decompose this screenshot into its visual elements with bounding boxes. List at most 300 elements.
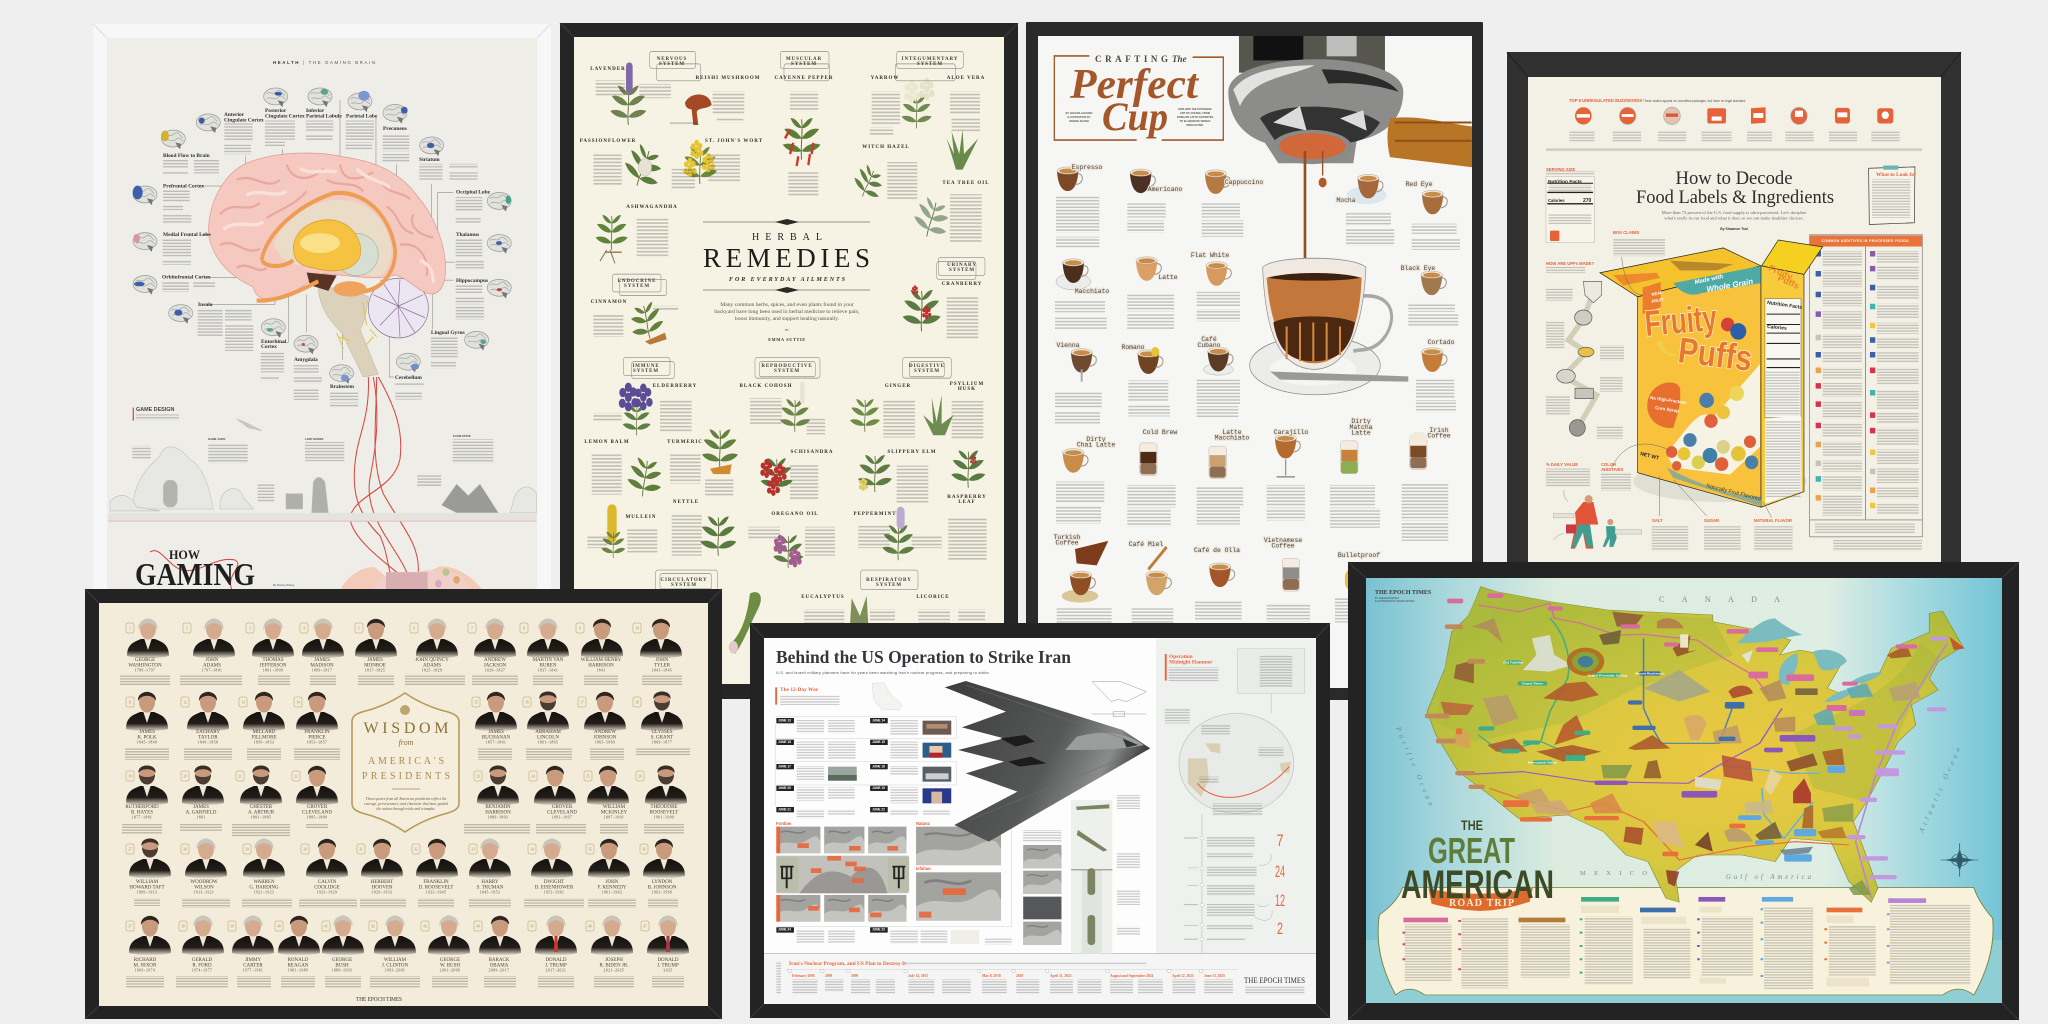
portrait: Franklin Pierce <box>294 692 340 760</box>
portrait: Zachary Taylor: 1849–1850 <box>198 740 218 744</box>
iran poster headings and numbers: 2009 <box>851 974 858 978</box>
portrait: George W. Bush: 43 <box>423 924 427 928</box>
cereal box lettering: FRUIT <box>1651 296 1665 304</box>
portrait: Calvin Coolidge: COOLIDGE <box>314 885 340 890</box>
herb illustrations <box>596 62 985 654</box>
iran poster headings and numbers: JUNE 13 <box>778 718 791 722</box>
brain region labels: Blood Flow to Brain <box>163 153 210 159</box>
portrait: Woodrow Wilson <box>181 838 230 908</box>
brain region labels: Cingulate Cortex <box>265 113 305 119</box>
portrait: Warren G. Harding: G. HARDING <box>249 885 279 890</box>
drink name labels: Cubano <box>1197 342 1221 349</box>
portrait: Gerald R. Ford: 1974–1977 <box>192 968 212 972</box>
portrait: Richard M. Nixon: RICHARD <box>134 958 156 963</box>
body system labels: IMMUNE <box>632 364 660 369</box>
brain region labels: Orbitofrontal Cortex <box>162 275 211 281</box>
title frame <box>1054 56 1223 140</box>
herb names: RASPBERRY <box>947 495 987 500</box>
portrait: James Monroe: JAMES <box>367 658 383 663</box>
portrait: Benjamin Harrison: 23 <box>476 774 480 778</box>
road trip stop labels: Old Faithful <box>1503 661 1523 665</box>
portrait: Andrew Johnson <box>578 692 626 760</box>
portrait: James K. Polk: 11 <box>128 700 132 704</box>
portrait: John Adams: ADAMS <box>203 663 221 668</box>
drink name labels: Espresso <box>1072 164 1103 171</box>
iran poster headings and numbers: JUNE 17 <box>778 764 791 768</box>
herb names: MULLEIN <box>626 515 656 520</box>
iran poster headings and numbers: JUNE 19 <box>872 786 885 790</box>
cereal box <box>1600 240 1823 507</box>
portrait: Millard Fillmore: 1850–1853 <box>254 740 274 744</box>
cereal box lettering: Made with <box>1694 274 1724 286</box>
operation timeline <box>1184 837 1272 941</box>
road trip title: AMERICAN <box>1401 863 1554 907</box>
herb names: LEAF <box>958 500 976 505</box>
perfect cup title: BY LEEANA ALESSIO <box>1066 112 1092 115</box>
drink name labels: Black Eye <box>1401 265 1435 272</box>
map landmark illustrations <box>1440 612 1965 895</box>
brain poster title: HOW <box>169 548 200 562</box>
portrait: Andrew Jackson: JACKSON <box>484 663 507 668</box>
portrait: Thomas Jefferson: 3 <box>249 626 251 630</box>
road trip stop labels: Grand Prismatic Spring <box>1588 674 1627 677</box>
drink name labels: Vietnamese <box>1264 537 1302 544</box>
iran poster headings and numbers: Natanz <box>916 821 930 826</box>
drink name labels: Dirty <box>1086 436 1106 443</box>
brain region labels: Posterior <box>265 108 286 114</box>
portrait: Theodore Roosevelt: 1901–1909 <box>654 815 674 819</box>
portrait: Joseph R. Biden Jr.: 2021–2025 <box>604 968 624 972</box>
iran poster headings and numbers: 2 <box>1277 919 1283 938</box>
iran poster headings and numbers: April 12, 2025 <box>1172 974 1194 978</box>
road trip title: THE <box>1461 817 1483 833</box>
portrait: Zachary Taylor <box>181 692 232 760</box>
portrait: Abraham Lincoln: ABRAHAM <box>535 730 561 735</box>
route lists <box>1402 897 1970 990</box>
iran poster headings and numbers: August and September 2024 <box>1110 974 1153 978</box>
iran poster headings and numbers: JUNE 21 <box>778 808 791 812</box>
portrait: Grover Cleveland second term: GROVER <box>552 805 572 810</box>
portrait: Grover Cleveland second term: 24 <box>531 774 535 778</box>
road trip title: GREAT <box>1428 830 1515 871</box>
portrait: George Washington: 1 <box>129 626 131 630</box>
perfect cup title <box>1066 54 1213 139</box>
title panel: Wisdom from America's Presidents: the nation through trials and triumphs. <box>376 807 436 811</box>
drink name labels: Carajillo <box>1274 429 1308 436</box>
drink name labels: Matcha <box>1349 424 1373 431</box>
portrait: Ronald Reagan: REAGAN <box>288 963 309 968</box>
portrait: John Quincy Adams: ADAMS <box>423 663 441 668</box>
portrait: Joseph R. Biden Jr.: JOSEPH <box>605 958 623 963</box>
portrait: Harry S. Truman <box>469 838 511 908</box>
portrait: Donald J. Trump 47: J. TRUMP <box>657 963 679 968</box>
portrait: James A. Garfield: A. GARFIELD <box>186 810 217 815</box>
timeline photos <box>828 721 951 803</box>
portrait: Martin Van Buren: 1837–1841 <box>538 668 558 672</box>
portrait: William Howard Taft <box>126 838 171 906</box>
portrait: Chester A. Arthur: 1881–1885 <box>251 815 271 819</box>
parent and child illustration <box>1553 490 1642 549</box>
portrait: Grover Cleveland: CLEVELAND <box>302 810 332 815</box>
portrait: Joseph R. Biden Jr.: R. BIDEN JR. <box>600 963 628 968</box>
portrait: Grover Cleveland: GROVER <box>307 805 327 810</box>
portrait: William J. Clinton: 1993–2001 <box>385 968 405 972</box>
portrait: Zachary Taylor: ZACHARY <box>196 730 220 735</box>
cereal box lettering: Puffs <box>1776 273 1801 291</box>
herb names: NETTLE <box>673 500 699 505</box>
portrait: Herbert Hoover: 31 <box>359 848 363 852</box>
food poster headings: By Shawnee Tsai <box>1720 227 1748 231</box>
portrait: Grover Cleveland: 1885–1889 <box>307 815 327 819</box>
portrait: Ulysses S. Grant: S. GRANT <box>651 735 673 740</box>
poster kicker: HEALTH | THE GAMING BRAIN <box>273 60 377 65</box>
portrait: Martin Van Buren: 8 <box>523 626 525 630</box>
herb names: TEA TREE OIL <box>942 181 990 186</box>
portrait: Benjamin Harrison: 1889–1893 <box>488 815 508 819</box>
portrait: Donald J. Trump 45: DONALD <box>545 958 567 963</box>
drink name labels: Macchiato <box>1075 288 1109 295</box>
body system labels: INTEGUMENTARY <box>902 57 958 62</box>
portrait: George Bush: 1989–1993 <box>332 968 352 972</box>
food poster headings: SALT <box>1652 518 1663 523</box>
perfect cup title: Cup <box>1102 94 1168 139</box>
portrait: Chester A. Arthur: CHESTER <box>250 805 272 810</box>
body system labels: SYSTEM <box>791 62 817 67</box>
drink name labels: Chai Latte <box>1077 442 1115 449</box>
portrait: Chester A. Arthur: 21 <box>238 774 242 778</box>
iran poster headings and numbers: Operation <box>1169 654 1193 660</box>
portrait: Barack Obama: BARACK <box>489 958 509 963</box>
brain region labels: GAME DESIGN <box>136 407 174 413</box>
herbal remedies title block: HERBAL <box>752 232 822 243</box>
iran poster headings and numbers <box>776 647 1305 985</box>
portrait: George Bush: GEORGE <box>332 958 352 963</box>
cereal box lettering: Nutrition Facts <box>1767 300 1803 311</box>
drink descriptions and recipes <box>1055 196 1460 625</box>
portrait: James K. Polk: 1845–1849 <box>137 740 157 744</box>
portrait: John F. Kennedy <box>586 838 636 908</box>
brain region labels: Inferior <box>306 108 324 114</box>
drink name labels: Café de Olla <box>1194 547 1240 554</box>
portrait: Grover Cleveland second term <box>529 766 586 834</box>
brain region labels: Parietal Lobe <box>346 114 378 120</box>
cereal box lettering: Whole Grain <box>1706 277 1754 294</box>
portrait: Andrew Johnson: 17 <box>580 700 584 704</box>
portrait: Herbert Hoover <box>357 838 406 908</box>
portrait: Andrew Jackson <box>468 618 518 685</box>
herb names: BLACK COHOSH <box>740 384 792 389</box>
title panel: Wisdom from America's Presidents: These quotes from all American presidents reflect the <box>366 797 447 801</box>
body system labels: RESPIRATORY <box>866 578 912 583</box>
herbal remedies title block <box>703 219 870 342</box>
portrait: Richard M. Nixon: M. NIXON <box>133 963 157 968</box>
portrait: William Howard Taft: WILLIAM <box>136 880 158 885</box>
herb names: YARROW <box>871 76 899 81</box>
herb names: PEPPERMINT <box>853 512 897 517</box>
portrait: Chester A. Arthur <box>232 766 290 837</box>
road trip stop labels: Monument Valley <box>1528 761 1557 764</box>
portrait: James A. Garfield <box>180 766 224 832</box>
portrait: George Washington: 1789–1797 <box>135 668 155 672</box>
portrait: Rutherford B. Hayes: 19 <box>128 774 132 778</box>
portrait: John Adams: JOHN <box>206 658 218 663</box>
road trip map labels: ILLUSTRATION BY ORIANA ZHANG <box>1375 600 1415 603</box>
brain region labels <box>136 108 491 441</box>
brain region labels: Anterior <box>224 112 244 118</box>
iran poster headings and numbers: Fordow <box>776 821 792 826</box>
portrait: Ulysses S. Grant: 1869–1877 <box>652 740 672 744</box>
portrait: William McKinley: 1897–1901 <box>604 815 624 819</box>
portrait: James K. Polk: K. POLK <box>137 735 157 740</box>
portrait: James Monroe: MONROE <box>364 663 386 668</box>
portrait: James K. Polk <box>125 692 169 760</box>
perfect cup title: ILLUSTRATION BY <box>1067 115 1091 119</box>
herb names: EUCALYPTUS <box>801 595 845 600</box>
drink name labels: Coffee <box>1055 540 1079 547</box>
drink name labels: Café Miel <box>1129 541 1163 548</box>
drink name labels: Romano <box>1121 344 1145 351</box>
drink name labels: Red Eye <box>1406 181 1433 188</box>
portrait: Dwight D. Eisenhower <box>524 838 584 908</box>
road trip map labels: MEXICO <box>1580 870 1647 877</box>
food poster headings: 270 <box>1583 198 1592 204</box>
drink name labels: Coffee <box>1271 543 1295 550</box>
drink name labels: Cortado <box>1428 339 1455 346</box>
brain region descriptions <box>132 121 493 502</box>
brain region labels: Striatum <box>419 157 440 163</box>
brain region labels: Amygdala <box>294 357 318 363</box>
herbal remedies title block: backyard have long been used in herbal medicine to relieve pain, <box>714 309 860 315</box>
herb names: TURMERIC <box>667 440 703 445</box>
portrait: Thomas Jefferson: 1801–1809 <box>263 668 283 672</box>
road trip map labels <box>1375 590 1962 881</box>
body system labels: REPRODUCTIVE <box>761 364 813 369</box>
portrait: Jimmy Carter <box>228 916 274 988</box>
portrait: William McKinley: 25 <box>586 774 590 778</box>
poster: Behind the US Operation to Strike Iran <box>750 623 1330 1018</box>
portrait: Lyndon B. Johnson: LYNDON <box>652 880 672 885</box>
portrait: John F. Kennedy: F. KENNEDY <box>597 885 627 890</box>
portrait: Calvin Coolidge <box>299 838 357 908</box>
portrait: Gerald R. Ford: 38 <box>181 924 185 928</box>
cereal box lettering: NET WT <box>1640 451 1660 462</box>
drink name labels: Irish <box>1429 427 1449 434</box>
portrait: Benjamin Harrison <box>464 766 530 834</box>
portrait: Donald J. Trump 45: 2017–2021 <box>546 968 566 972</box>
portrait: William J. Clinton: WILLIAM <box>384 958 406 963</box>
portrait: Lyndon B. Johnson <box>640 838 685 908</box>
herb names: ASHWAGANDHA <box>626 205 678 210</box>
cereal box lettering: Fruity <box>1643 297 1718 344</box>
portrait: Barack Obama <box>474 916 521 988</box>
title panel: Wisdom from America's Presidents <box>352 693 459 832</box>
portrait: James Buchanan: 1857–1861 <box>486 740 506 744</box>
portrait: Joseph R. Biden Jr.: 46 <box>588 924 592 928</box>
food poster side notes <box>1546 171 1922 551</box>
brain region labels: Entorhinal <box>261 339 286 345</box>
food poster headings: What to Look for <box>1876 172 1917 178</box>
herbal remedies title block: Many common herbs, spices, and even plants found in your <box>720 301 854 308</box>
food poster headings: How to Decode <box>1676 168 1792 189</box>
portrait: Theodore Roosevelt: ROOSEVELT <box>650 810 678 815</box>
portrait: James A. Garfield: 20 <box>183 774 187 778</box>
portrait: Franklin D. Roosevelt <box>412 838 458 908</box>
herb names: LAVENDER <box>590 67 626 72</box>
UPF manufacturing process diagram <box>1546 281 1624 439</box>
portrait: Woodrow Wilson: WILSON <box>194 885 214 890</box>
perfect cup title: EXPLORE THE EXTENSIVE <box>1178 108 1212 111</box>
portrait: William Henry Harrison: 9 <box>579 626 581 630</box>
herbal remedies title block: BY <box>785 328 790 332</box>
herb names: REISHI MUSHROOM <box>696 76 760 81</box>
brain region labels: Precuneus <box>383 126 407 132</box>
portrait: Rutherford B. Hayes: 1877–1881 <box>132 815 152 819</box>
portrait: William Howard Taft: 1909–1913 <box>137 890 157 894</box>
portrait: James A. Garfield: JAMES <box>193 805 209 810</box>
portrait: Ulysses S. Grant <box>633 692 690 756</box>
iran poster headings and numbers: June 13, 2025 <box>1204 974 1225 978</box>
portrait: John Adams: 1797–1801 <box>202 668 222 672</box>
drink name labels: Coffee <box>1427 433 1451 440</box>
brain region labels: Cingulate Cortex <box>224 117 264 123</box>
perfect cup title: FAMILIAR LATTE FAVORITES <box>1177 115 1213 119</box>
portrait: Harry S. Truman: HARRY <box>481 880 499 885</box>
herb names: ST. JOHN'S WORT <box>705 139 763 144</box>
portrait: Jimmy Carter: 1977–1981 <box>243 968 263 972</box>
food poster headings: ADDITIVES <box>1601 467 1624 472</box>
herb names: ELDERBERRY <box>653 384 697 389</box>
body system labels: SYSTEM <box>659 62 685 67</box>
hands and controller <box>340 566 482 589</box>
brain region labels: GAME JUICE <box>208 437 226 441</box>
body system labels: DIGESTIVE <box>909 364 945 369</box>
portrait: William Howard Taft: 27 <box>128 848 132 852</box>
road trip map labels: Gulf of America <box>1726 874 1812 881</box>
portrait: Dwight D. Eisenhower: 34 <box>530 848 534 852</box>
portrait: Rutherford B. Hayes <box>122 766 168 834</box>
herb names: PASSIONFLOWER <box>580 139 636 144</box>
iran poster headings and numbers: Iran's Nuclear Program, and US Plan to Destroy It <box>789 961 906 967</box>
portrait: John Tyler: JOHN <box>656 658 668 663</box>
herb description paragraphs <box>587 80 987 632</box>
portrait: Woodrow Wilson: WOODROW <box>190 880 218 885</box>
portrait: John Adams <box>180 618 242 685</box>
portrait: Ulysses S. Grant: ULYSSES <box>651 730 673 735</box>
portrait: Abraham Lincoln: 16 <box>525 700 529 704</box>
portrait: George W. Bush <box>421 916 470 988</box>
poster: The Gaming Brain <box>93 24 551 624</box>
portrait: Jimmy Carter: 39 <box>230 924 234 928</box>
road trip map labels: Atlantic Ocean <box>1917 746 1962 835</box>
portrait: William McKinley: WILLIAM <box>603 805 625 810</box>
portrait: George Washington: GEORGE <box>135 658 155 663</box>
drink name labels: Latte <box>1158 274 1178 281</box>
body system labels: NERVOUS <box>657 57 687 62</box>
body system labels: ENDOCRINE <box>618 279 656 284</box>
food poster headings: TOP 8 UNREGULATED BUZZWORDS <box>1569 98 1642 103</box>
road trip title banner shape <box>1428 888 1533 911</box>
portrait: John Quincy Adams: 1825–1829 <box>422 668 442 672</box>
iran poster headings and numbers: JUNE 20 <box>778 786 791 790</box>
iran poster headings and numbers: Isfahan <box>916 866 931 871</box>
portrait: George W. Bush: W. BUSH <box>440 963 460 968</box>
drink name labels: Dirty <box>1351 418 1371 425</box>
food poster headings: Food Labels & Ingredients <box>1636 187 1834 208</box>
drink name labels: Bulletproof <box>1338 552 1380 559</box>
drink name labels: Mocha <box>1336 197 1356 204</box>
food poster headings: HOW ARE UPFs MADE? <box>1546 261 1594 266</box>
portrait: Benjamin Harrison: BENJAMIN <box>485 805 511 810</box>
US map <box>1427 587 1963 902</box>
portrait: William J. Clinton: 42 <box>371 924 375 928</box>
brain poster title: GAMING <box>135 556 255 592</box>
title panel: Wisdom from America's Presidents: from <box>399 738 414 747</box>
herb names: CAYENNE PEPPER <box>775 76 833 81</box>
poster: Wisdom from America's Presidents <box>85 589 722 1019</box>
title panel: Wisdom from America's Presidents: AMERICA'S <box>368 756 444 767</box>
portrait: James Buchanan: BUCHANAN <box>482 735 511 740</box>
portrait: Franklin Pierce: FRANKLIN <box>304 730 330 735</box>
portrait: George W. Bush: GEORGE <box>440 958 460 963</box>
body system labels: SYSTEM <box>949 268 975 273</box>
drink name labels: Latte <box>1351 430 1371 437</box>
iran poster headings and numbers: JUNE 18 <box>872 764 885 768</box>
portrait: William Henry Harrison: HARRISON <box>588 663 614 668</box>
brain region labels: Cerebellum <box>395 375 422 381</box>
brain illustration <box>208 153 446 377</box>
portrait: James Buchanan <box>472 692 517 760</box>
portrait: Ronald Reagan: 40 <box>277 924 281 928</box>
cereal box lettering: Puffs <box>1676 329 1754 379</box>
brain poster title <box>136 550 294 589</box>
nuclear program timeline <box>776 962 1304 995</box>
portrait: George Bush: 41 <box>324 924 328 928</box>
portrait: James Madison: MADISON <box>310 663 334 668</box>
food poster headings: % DAILY VALUE <box>1546 462 1578 467</box>
road trip routes <box>1458 603 1947 898</box>
food poster headings: BOX CLAIMS <box>1613 230 1639 235</box>
portrait: Dwight D. Eisenhower: DWIGHT <box>544 880 564 885</box>
poster: Crafting the Perfect Cup <box>1026 22 1483 700</box>
drink name labels: Americano <box>1148 186 1182 193</box>
portrait: Theodore Roosevelt: THEODORE <box>651 805 677 810</box>
portrait: Franklin D. Roosevelt: 1933–1945 <box>426 890 446 894</box>
cereal box lettering: Naturally Fruit Flavored <box>1706 483 1761 502</box>
poster: Herbal Remedies <box>560 23 1018 699</box>
portrait: Ulysses S. Grant: 18 <box>635 700 639 704</box>
portrait: Harry S. Truman: S. TRUMAN <box>477 885 504 890</box>
road trip stop labels <box>1425 593 1948 879</box>
portrait: Jimmy Carter: JIMMY <box>245 958 261 963</box>
perfect cup title: ORIANA ZHANG <box>1069 119 1089 123</box>
iran poster headings and numbers: THE EPOCH TIMES <box>1244 976 1305 985</box>
drink name labels: Cold Brew <box>1143 429 1177 436</box>
food poster headings: These claims appear on countless packages, but have no legal standard. <box>1643 99 1746 103</box>
portrait: Ronald Reagan: 1981–1989 <box>288 968 308 972</box>
portrait: George Washington: WASHINGTON <box>128 663 162 668</box>
portrait: Donald J. Trump 47: 2025 <box>663 968 673 972</box>
herb names: SLIPPERY ELM <box>887 450 937 455</box>
cereal box lettering: Calories <box>1767 324 1787 332</box>
portrait: Abraham Lincoln <box>523 692 572 760</box>
food poster headings: COLOR <box>1601 462 1616 467</box>
drink name labels: Macchiato <box>1215 435 1249 442</box>
herb names: WITCH HAZEL <box>862 145 910 150</box>
portrait: George Bush <box>322 916 364 988</box>
brain region labels: Occipital Lobe <box>456 190 491 196</box>
portrait: Herbert Hoover: HOOVER <box>372 885 393 890</box>
portrait: Gerald R. Ford: R. FORD <box>192 963 212 968</box>
